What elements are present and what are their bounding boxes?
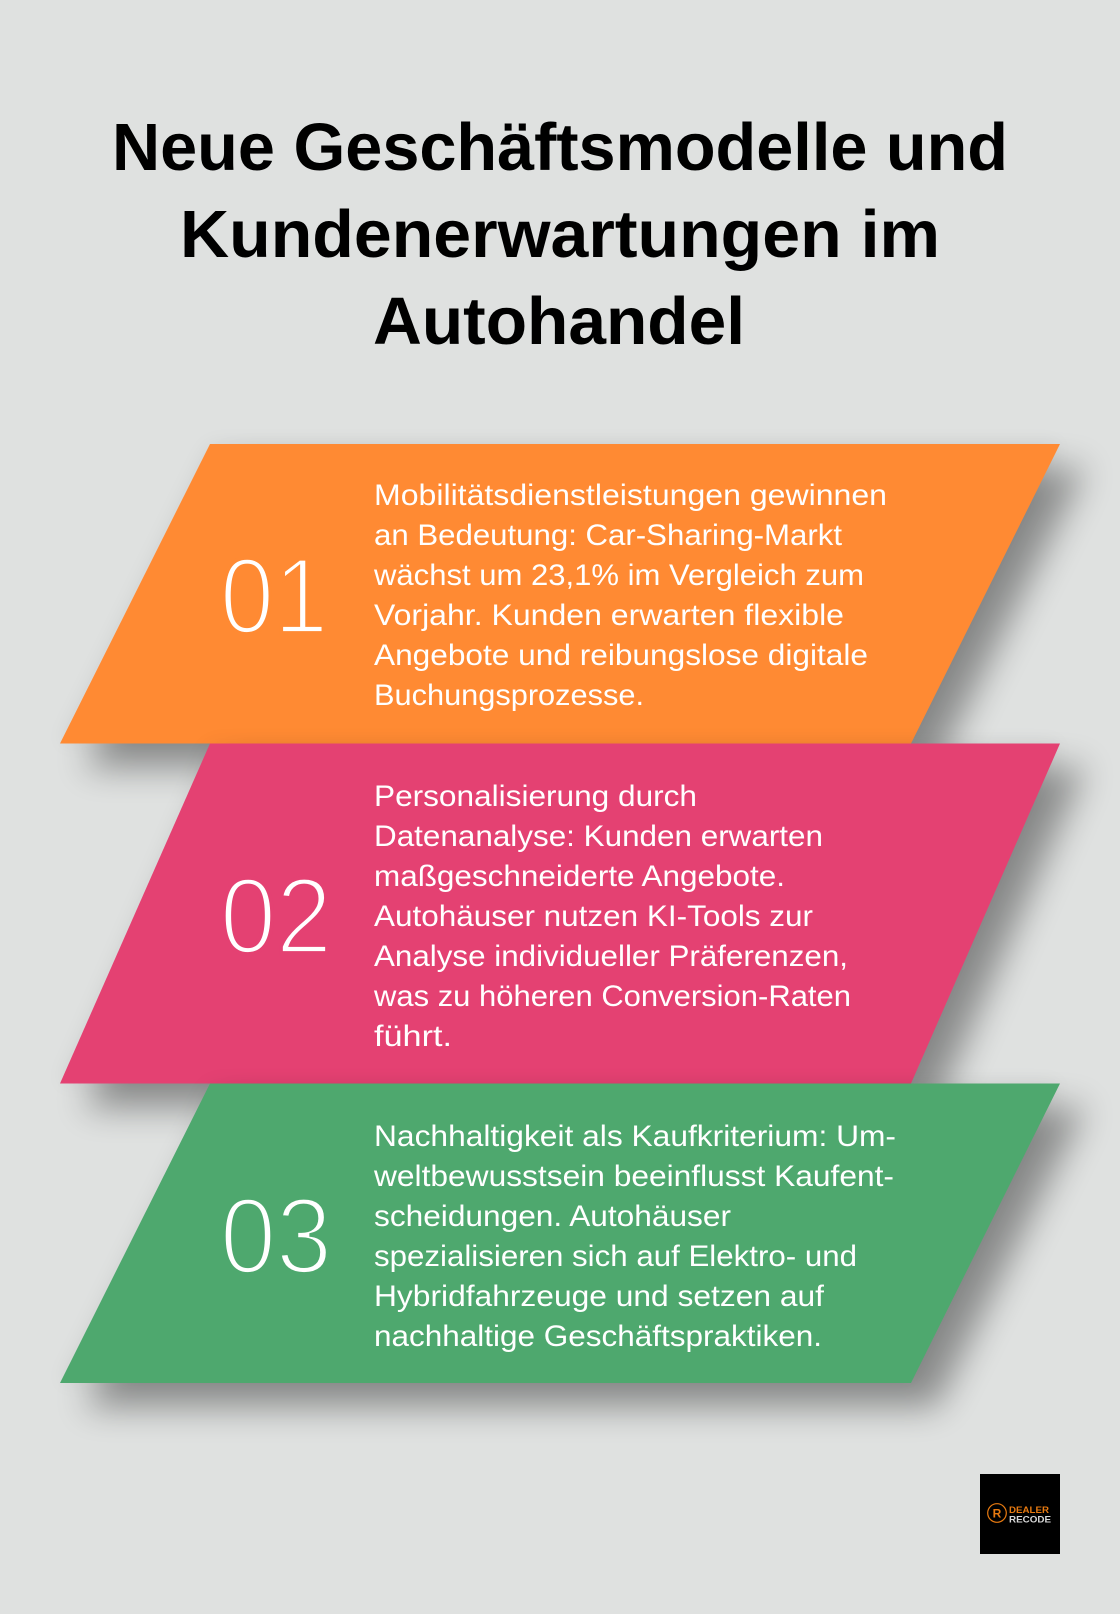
text block 03: weltbewusstsein beeinflusst Kaufent- bbox=[373, 1160, 894, 1193]
logo: Dealer Recode bbox=[980, 1474, 1060, 1554]
text block 03: Hybridfahrzeuge und setzen auf bbox=[374, 1280, 825, 1313]
title bbox=[112, 110, 1008, 359]
number 03: 03 bbox=[220, 1175, 332, 1296]
panel shape: green parallelogram bbox=[60, 1084, 1060, 1383]
text block 01: Angebote und reibungslose digitale bbox=[374, 639, 868, 672]
number 01: 01 bbox=[220, 535, 328, 656]
text block 01: Buchungsprozesse. bbox=[374, 679, 644, 712]
text block 01: Vorjahr. Kunden erwarten flexible bbox=[374, 599, 844, 632]
text block 02: führt. bbox=[374, 1020, 452, 1053]
panel shape: pink parallelogram bbox=[60, 744, 1060, 1084]
text block 02: Analyse individueller Präferenzen, bbox=[374, 940, 848, 973]
panel: 02 Personalisierung bbox=[60, 744, 1060, 1084]
title: Neue Geschäftsmodelle und bbox=[112, 110, 1008, 185]
logo: Dealer Recode: DEALER bbox=[1009, 1505, 1049, 1516]
text block 02: maßgeschneiderte Angebote. bbox=[374, 860, 785, 893]
panel: 03 Nachhaltigkeit bbox=[60, 1084, 1060, 1383]
text block 02: was zu höheren Conversion-Raten bbox=[373, 980, 851, 1013]
panel shape: orange parallelogram bbox=[60, 444, 1060, 744]
number 02: 02 bbox=[220, 855, 332, 976]
text block 03: scheidungen. Autohäuser bbox=[374, 1200, 731, 1233]
text block 03: Nachhaltigkeit als Kaufkriterium: Um- bbox=[374, 1120, 896, 1153]
logo: Dealer Recode: R bbox=[993, 1506, 1002, 1520]
text block 01: Mobilitätsdienstleistungen gewinnen bbox=[374, 479, 887, 512]
text block 02: Autohäuser nutzen KI-Tools zur bbox=[374, 900, 813, 933]
text block 01: an Bedeutung: Car-Sharing-Markt bbox=[374, 519, 843, 552]
text block 03: spezialisieren sich auf Elektro- und bbox=[374, 1240, 857, 1273]
text block 03: nachhaltige Geschäftspraktiken. bbox=[374, 1320, 822, 1353]
text block 01: wächst um 23,1% im Vergleich zum bbox=[373, 559, 864, 592]
text block 01 bbox=[373, 479, 887, 712]
text block 03 bbox=[373, 1120, 896, 1353]
text block 02: Personalisierung durch bbox=[374, 780, 697, 813]
logo: Dealer Recode: RECODE bbox=[1009, 1514, 1051, 1526]
text block 02: Datenanalyse: Kunden erwarten bbox=[374, 820, 823, 853]
title: Autohandel bbox=[373, 284, 745, 359]
panel: 01 Mobilitätsdienstleistungen bbox=[60, 444, 1060, 744]
title: Kundenerwartungen im bbox=[180, 197, 940, 272]
text block 02 bbox=[373, 780, 851, 1053]
